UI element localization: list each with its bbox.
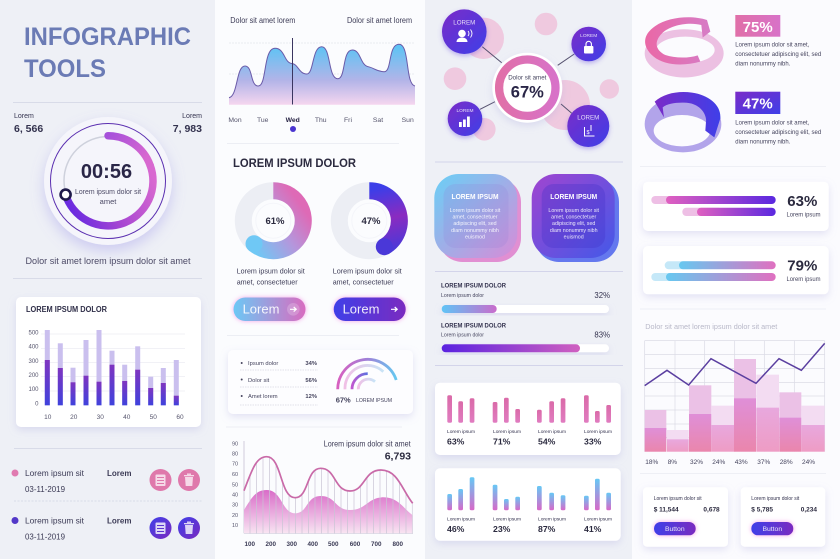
- progress: 83%: 83%: [594, 330, 610, 340]
- card: 63% bars: 63%: [787, 193, 817, 210]
- weekday labels: Thu: [315, 117, 327, 124]
- weekday labels: Fri: [344, 117, 352, 124]
- panel: pink mini bars: Lorem ipsum: [493, 429, 521, 435]
- icon: trash: [178, 469, 200, 491]
- button: dark gradient: Lorem: [343, 302, 379, 316]
- weekday labels: Sun: [402, 117, 414, 124]
- card: amount two: $ 5,785: [751, 506, 773, 514]
- donut captions: amet, consectetuer: [237, 278, 298, 286]
- line and area chart: 400: [307, 541, 318, 548]
- card: light squircle: adipiscing elit, sed: [453, 221, 497, 227]
- button: Button: [762, 526, 782, 533]
- stat: right counter: Lorem: [182, 113, 202, 120]
- panel: blue mini bars: [435, 468, 621, 541]
- weekday labels: Mon: [228, 117, 242, 124]
- title: TOOLS: [24, 55, 106, 83]
- 3D ring: pink: [645, 17, 724, 77]
- card: light squircle: amet, consectetuer: [452, 214, 498, 220]
- icon node: bars: [448, 101, 482, 136]
- stat: left counter: [14, 113, 43, 135]
- donut: 61%: [243, 191, 303, 252]
- y axis labels: 400: [28, 345, 39, 351]
- donut captions: Lorem ipsum dolor sit: [237, 266, 306, 276]
- text: 47% description: diam nonummy nibh.: [735, 138, 791, 146]
- list row 1: 03-11-2019: [25, 484, 65, 494]
- percentage list: 34%: [305, 361, 317, 367]
- text: 75% description: [735, 42, 822, 68]
- center gauge: 67%: 67%: [511, 84, 544, 102]
- y axis labels: 500: [28, 330, 39, 336]
- card: 79% bars: [643, 246, 829, 294]
- icon node: document: $: [586, 130, 590, 136]
- timer gauge: Lorem ipsum dolor sit: [75, 187, 142, 196]
- timer gauge: amet: [100, 197, 117, 206]
- card: amount one: 0,678: [703, 506, 720, 514]
- card: light squircle: LOREM IPSUM: [452, 194, 499, 201]
- card: amount one: $ 11,544: [654, 506, 679, 514]
- text: 75% description: consectetuer adipiscing elit, sed: [735, 51, 822, 58]
- arc gauge: [338, 359, 396, 389]
- y axis labels: 300: [28, 359, 39, 365]
- panel: pink mini bars: [435, 383, 621, 455]
- percentage list: [241, 361, 317, 400]
- text: 75% description: diam nonummy nibh.: [735, 60, 791, 68]
- text: 75% description: Lorem ipsum dolor sit amet,: [735, 42, 810, 48]
- card: dark squircle: Lorem ipsum dolor sit: [548, 208, 600, 214]
- 3D ring: purple: [645, 92, 721, 152]
- panel: pink mini bars: Lorem ipsum: [584, 429, 612, 435]
- card: dark squircle: [532, 174, 619, 262]
- icon node: voice: LOREM: [453, 20, 475, 26]
- title: INFOGRAPHIC: [24, 23, 191, 51]
- line and area chart: 50: [232, 482, 238, 488]
- progress: 32%: 32%: [594, 291, 610, 300]
- x axis labels: 20: [70, 414, 78, 421]
- icon: document: [150, 469, 172, 491]
- button: light gradient: Lorem: [243, 302, 279, 316]
- button: Button: [665, 526, 685, 533]
- button: dark gradient: [334, 298, 406, 321]
- card: dark squircle: adipiscing elit, sed: [552, 221, 595, 227]
- line and area chart: 700: [371, 541, 382, 548]
- donut: 47%: 47%: [361, 216, 381, 227]
- heading: LOREM IPSUM DOLOR: [233, 156, 356, 170]
- card: light squircle: euismod: [465, 234, 485, 240]
- card: amount two: Lorem ipsum dolor sit: [751, 496, 800, 502]
- line and area chart: 80: [232, 452, 238, 458]
- line and area chart: 30: [232, 503, 238, 509]
- x axis labels: 10: [44, 414, 52, 421]
- panel: stacked bar chart card: [16, 297, 201, 427]
- active day marker: [290, 126, 296, 132]
- y axis labels: 200: [28, 373, 39, 379]
- x axis labels: 30: [97, 414, 104, 421]
- panel: left column: [0, 0, 215, 559]
- weekday labels: Wed: [286, 117, 300, 124]
- icon node: bars: LOREM: [456, 108, 474, 114]
- list row 1: Lorem: [107, 469, 131, 478]
- progress: 83%: [441, 324, 610, 352]
- donut captions: [237, 266, 403, 286]
- progress: 32%: [441, 284, 610, 313]
- panel: blue mini bars: Lorem ipsum: [584, 516, 612, 522]
- panel: blue mini bars: 87%: [538, 524, 556, 534]
- percentage list: 56%: [305, 378, 317, 384]
- weekly area chart: [229, 38, 415, 105]
- card: 79% bars: Lorem ipsum: [786, 276, 820, 283]
- arc gauge label: 67%: [336, 395, 351, 404]
- chart heading: LOREM IPSUM DOLOR: [26, 305, 107, 314]
- combo chart labels: 37%: [757, 459, 771, 466]
- combo chart labels: 24%: [712, 459, 726, 466]
- x axis labels: 50: [150, 414, 157, 421]
- panel: pink mini bars: 54%: [538, 436, 556, 446]
- percentage list: Dolor sit: [248, 378, 270, 384]
- combo chart labels: 24%: [802, 459, 815, 466]
- stat: right counter: 7, 983: [173, 123, 202, 135]
- y axis labels: 0: [35, 402, 39, 408]
- line and area chart: 60: [232, 472, 238, 478]
- list row 1: Lorem ipsum sit: [25, 468, 85, 478]
- x axis labels: 40: [123, 414, 131, 421]
- card: amount two: [741, 487, 825, 547]
- line and area chart: 10: [232, 523, 238, 529]
- card: 63% bars: Lorem ipsum: [786, 212, 820, 218]
- line and area chart: 300: [286, 541, 297, 548]
- panel: blue mini bars: Lorem ipsum: [493, 516, 521, 522]
- percentage list: Amet lorem: [248, 394, 278, 400]
- center gauge: 67%: [492, 53, 562, 123]
- list row 2: 03-11-2019: [25, 532, 65, 542]
- list row 2: Lorem ipsum sit: [25, 516, 85, 526]
- percentage list: 12%: [305, 394, 317, 400]
- list row 1: [12, 468, 200, 494]
- network diagram: [442, 9, 619, 147]
- background blobs: [444, 13, 619, 141]
- line and area chart: 100: [244, 541, 255, 548]
- donut captions: Lorem ipsum dolor sit: [333, 266, 403, 276]
- line and area chart: 20: [232, 513, 238, 519]
- line and area chart: Lorem ipsum dolor sit amet: [324, 440, 411, 448]
- text: 47% description: Lorem ipsum dolor sit amet,: [735, 120, 810, 126]
- icon: trash: [178, 517, 200, 539]
- card: light squircle: Lorem ipsum dolor sit: [450, 208, 501, 214]
- dark bars: [45, 360, 179, 405]
- line and area chart: 800: [392, 541, 403, 548]
- progress: 32%: LOREM IPSUM DOLOR: [441, 284, 507, 290]
- panel: pink mini bars: Lorem ipsum: [538, 429, 566, 435]
- line and area chart: 200: [265, 541, 276, 548]
- line and area chart: [232, 440, 413, 548]
- combo chart heading: Dolor sit amet lorem ipsum dolor sit amet: [645, 322, 778, 331]
- weekday labels: Tue: [257, 117, 269, 124]
- panel: fourth column: [632, 0, 840, 559]
- title: [24, 23, 191, 83]
- icon node: document: LOREM: [577, 114, 599, 122]
- panel: pink mini bars: 63%: [447, 436, 465, 446]
- card: dark squircle: LOREM IPSUM: [550, 194, 597, 201]
- card: 79% bars: 79%: [787, 258, 817, 275]
- progress: 83%: Lorem ipsum dolor: [441, 332, 484, 338]
- timer gauge: [44, 117, 172, 245]
- icon node: document: [567, 105, 609, 147]
- icon: document: [150, 517, 172, 539]
- y axis labels: [28, 330, 39, 408]
- progress: 83%: LOREM IPSUM DOLOR: [441, 324, 507, 330]
- percentage list: Ipsum dolor: [248, 361, 278, 367]
- combo chart: bars and line: [645, 341, 825, 452]
- x axis labels: 60: [176, 414, 184, 421]
- button: light gradient: [234, 298, 306, 321]
- line and area chart: 40: [232, 492, 238, 498]
- stat badge: 75%: 75%: [743, 19, 773, 36]
- area chart captions: [230, 16, 412, 25]
- stat: right counter: [173, 113, 202, 135]
- card: light squircle: [434, 174, 521, 262]
- card: dark squircle: euismod: [564, 234, 584, 240]
- combo chart labels: 28%: [780, 459, 793, 466]
- card: 63% bars: [643, 182, 829, 231]
- card: dark squircle: amet, consectetuer: [551, 214, 596, 220]
- weekday labels: [228, 117, 414, 124]
- weekday labels: Sat: [373, 117, 383, 124]
- panel: pink mini bars: Lorem ipsum: [447, 429, 475, 435]
- line and area chart: 6,793: [385, 450, 411, 462]
- card: amount one: [643, 487, 728, 547]
- panel: blue mini bars: 23%: [493, 524, 511, 534]
- panel: blue mini bars: 46%: [447, 524, 465, 534]
- connector lines: [480, 47, 574, 113]
- card: light squircle: diam nonummy nibh: [451, 228, 499, 234]
- icon node: voice: [442, 9, 487, 54]
- line and area chart: 90: [232, 441, 238, 447]
- combo chart labels: 32%: [690, 459, 703, 466]
- text: 47% description: consectetuer adipiscing elit, sed: [735, 129, 822, 136]
- donut: 61%: 61%: [265, 216, 285, 227]
- text: 47% description: [735, 120, 822, 146]
- list row 2: [12, 516, 200, 542]
- stat: left counter: Lorem: [14, 113, 34, 120]
- icon node: lock: LOREM: [580, 33, 597, 39]
- arc gauge label: [336, 395, 392, 404]
- panel: list and arcs card: [228, 350, 413, 414]
- stat badge: 47%: [735, 92, 780, 114]
- combo chart labels: [645, 459, 815, 466]
- panel: blue mini bars: 41%: [584, 524, 602, 534]
- card: dark squircle: diam nonummy nibh: [550, 228, 598, 234]
- combo chart labels: 8%: [668, 459, 677, 466]
- panel: third column: [425, 0, 632, 559]
- line and area chart: 70: [232, 462, 238, 468]
- stat badge: 47%: 47%: [743, 96, 773, 112]
- line and area chart: 600: [350, 541, 361, 548]
- list row 2: Lorem: [107, 516, 131, 526]
- arc gauge label: LOREM IPSUM: [356, 398, 392, 404]
- center gauge: 67%: Dolor sit amet: [508, 74, 547, 82]
- stat: left counter: 6, 566: [14, 123, 43, 135]
- area chart captions: Dolor sit amet lorem: [230, 16, 296, 25]
- panel: blue mini bars: Lorem ipsum: [538, 516, 566, 522]
- stat badge: 75%: [735, 15, 780, 37]
- card: amount two: 0,234: [801, 506, 817, 514]
- card: amount one: Lorem ipsum dolor sit: [654, 496, 702, 502]
- progress: 32%: Lorem ipsum dolor: [441, 293, 484, 299]
- combo chart labels: 43%: [735, 459, 748, 466]
- x axis labels: [44, 414, 184, 421]
- combo chart labels: 18%: [645, 459, 659, 466]
- panel: pink mini bars: 33%: [584, 436, 602, 446]
- panel: blue mini bars: Lorem ipsum: [447, 516, 475, 522]
- donut captions: amet, consectetuer: [333, 278, 394, 286]
- donut: 47%: [339, 191, 399, 255]
- light bars: [45, 330, 179, 405]
- line and area chart: 500: [328, 541, 339, 548]
- timer gauge: 00:56: [81, 161, 132, 183]
- panel: second column: [224, 17, 416, 546]
- y axis labels: 100: [28, 387, 39, 393]
- gauge caption: Dolor sit amet lorem ipsum dolor sit amet: [26, 256, 191, 267]
- area chart captions: Dolor sit amet lorem: [347, 16, 412, 25]
- icon node: lock: [571, 27, 606, 61]
- panel: pink mini bars: 71%: [493, 436, 511, 446]
